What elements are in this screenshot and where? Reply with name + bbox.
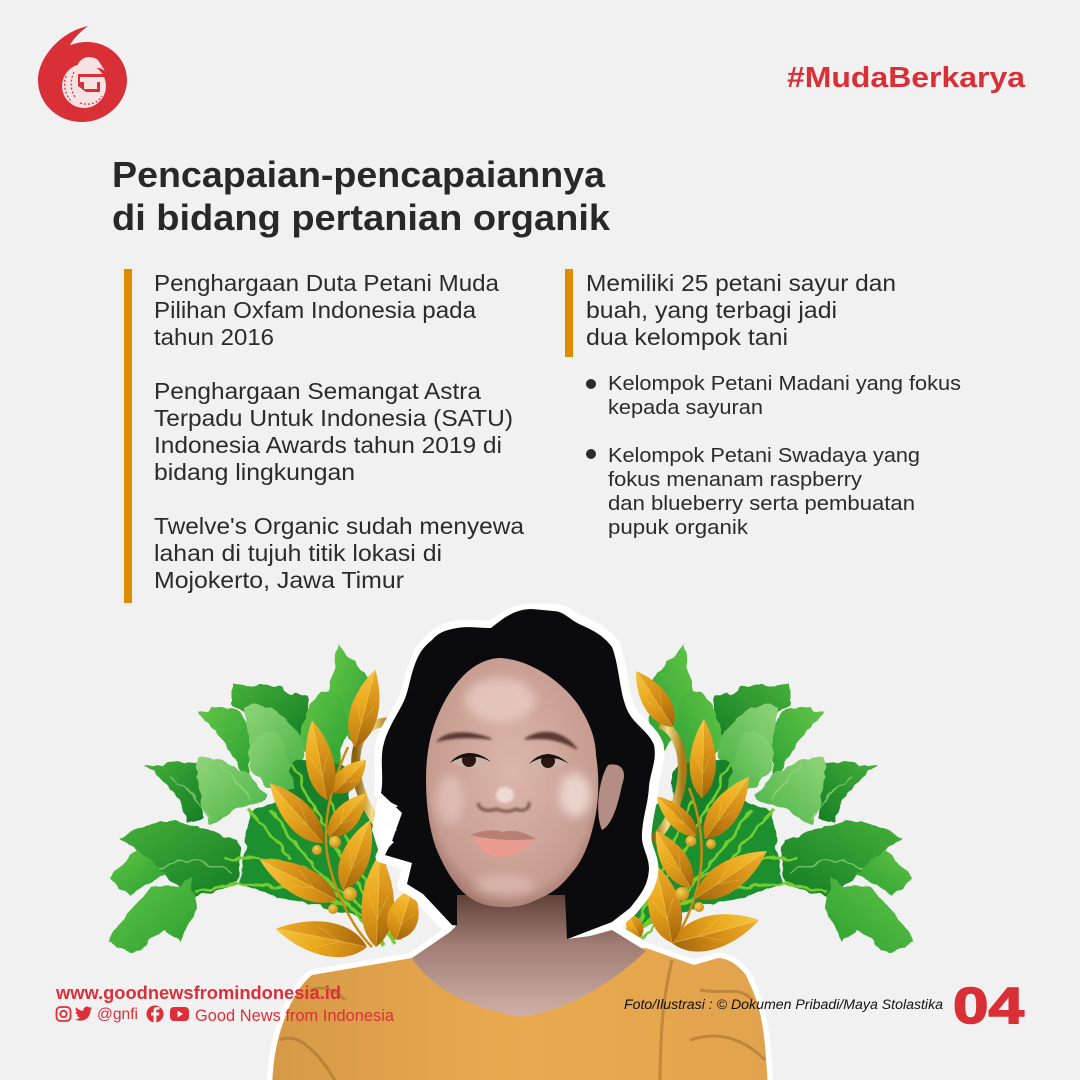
neck [412, 895, 646, 1017]
text block: land rental: Twelve's Organic sudah menyewa [154, 513, 524, 539]
vegetables right [622, 645, 914, 953]
eyes [450, 753, 569, 768]
heading: Pencapaian-pencapaiannya [112, 154, 606, 195]
face [426, 658, 598, 907]
white cut-out outline [272, 609, 768, 1080]
heading: di bidang pertanian organik [112, 197, 611, 238]
ear [598, 764, 624, 830]
bullet: Swadaya: fokus menanam raspberry [608, 468, 863, 491]
text block: SATU award: Penghargaan Semangat Astra [154, 378, 481, 404]
logo: red drop with emblem [38, 26, 127, 122]
social row [56, 1006, 395, 1025]
hair [381, 609, 655, 940]
laurel left [253, 666, 426, 964]
bullet: Swadaya [586, 444, 920, 539]
bullet: Swadaya: Kelompok Petani Swadaya yang [608, 444, 920, 467]
shirt [272, 948, 768, 1080]
text block: Oxfam award: Pilihan Oxfam Indonesia pada [154, 297, 476, 323]
text block: land rental: lahan di tujuh titik lokasi di [154, 540, 442, 566]
panel: left achievements [124, 269, 524, 603]
text block: farmers: Memiliki 25 petani sayur dan [586, 270, 896, 296]
portrait [272, 609, 768, 1080]
accent bar left [124, 269, 132, 603]
website url: www.goodnewsfromindonesia.id [55, 982, 341, 1003]
vegetables left [108, 645, 400, 953]
icon: twitter [75, 1007, 92, 1021]
text block: land rental: Mojokerto, Jawa Timur [154, 567, 404, 593]
text block: SATU award [154, 378, 513, 485]
text block: farmers: buah, yang terbagi jadi [586, 297, 837, 323]
text block: farmers: dua kelompok tani [586, 324, 788, 350]
icon: youtube [170, 1007, 189, 1021]
text block: SATU award: bidang lingkungan [154, 459, 355, 485]
channel name: Good News from Indonesia [195, 1006, 395, 1025]
brows [438, 733, 577, 749]
jagged hair edge [372, 796, 399, 856]
bullet: Swadaya: pupuk organik [608, 516, 749, 539]
laurel right [621, 664, 775, 959]
lips [470, 830, 536, 857]
text block: SATU award: Indonesia Awards tahun 2019 di [154, 432, 502, 458]
hashtag: #MudaBerkarya [787, 62, 1026, 94]
heading [112, 154, 611, 238]
nose [478, 787, 529, 811]
page number: 04 [953, 977, 1025, 1034]
bullet: Madani: kepada sayuran [608, 396, 763, 419]
shirt folds [280, 960, 765, 1080]
photo credit: Foto/Ilustrasi : © Dokumen Pribadi/Maya Stolastika [624, 997, 944, 1012]
handle: @gnfi [97, 1006, 138, 1023]
text block: Oxfam award: Penghargaan Duta Petani Muda [154, 270, 499, 296]
bullet: Madani [586, 372, 961, 419]
face highlights [436, 678, 591, 895]
text block: Oxfam award: tahun 2016 [154, 324, 274, 350]
text block: land rental [154, 513, 524, 593]
text block: Oxfam award [154, 270, 499, 350]
icon: instagram [56, 1007, 70, 1021]
icon: facebook [146, 1006, 164, 1023]
text block: farmers [586, 270, 896, 350]
bullet: Swadaya: dan blueberry serta pembuatan [608, 492, 915, 515]
bullet: Madani: Kelompok Petani Madani yang fokus [608, 372, 961, 395]
panel: right farmers [565, 269, 961, 539]
text block: SATU award: Terpadu Untuk Indonesia (SATU) [154, 405, 513, 431]
accent bar right [565, 269, 573, 357]
